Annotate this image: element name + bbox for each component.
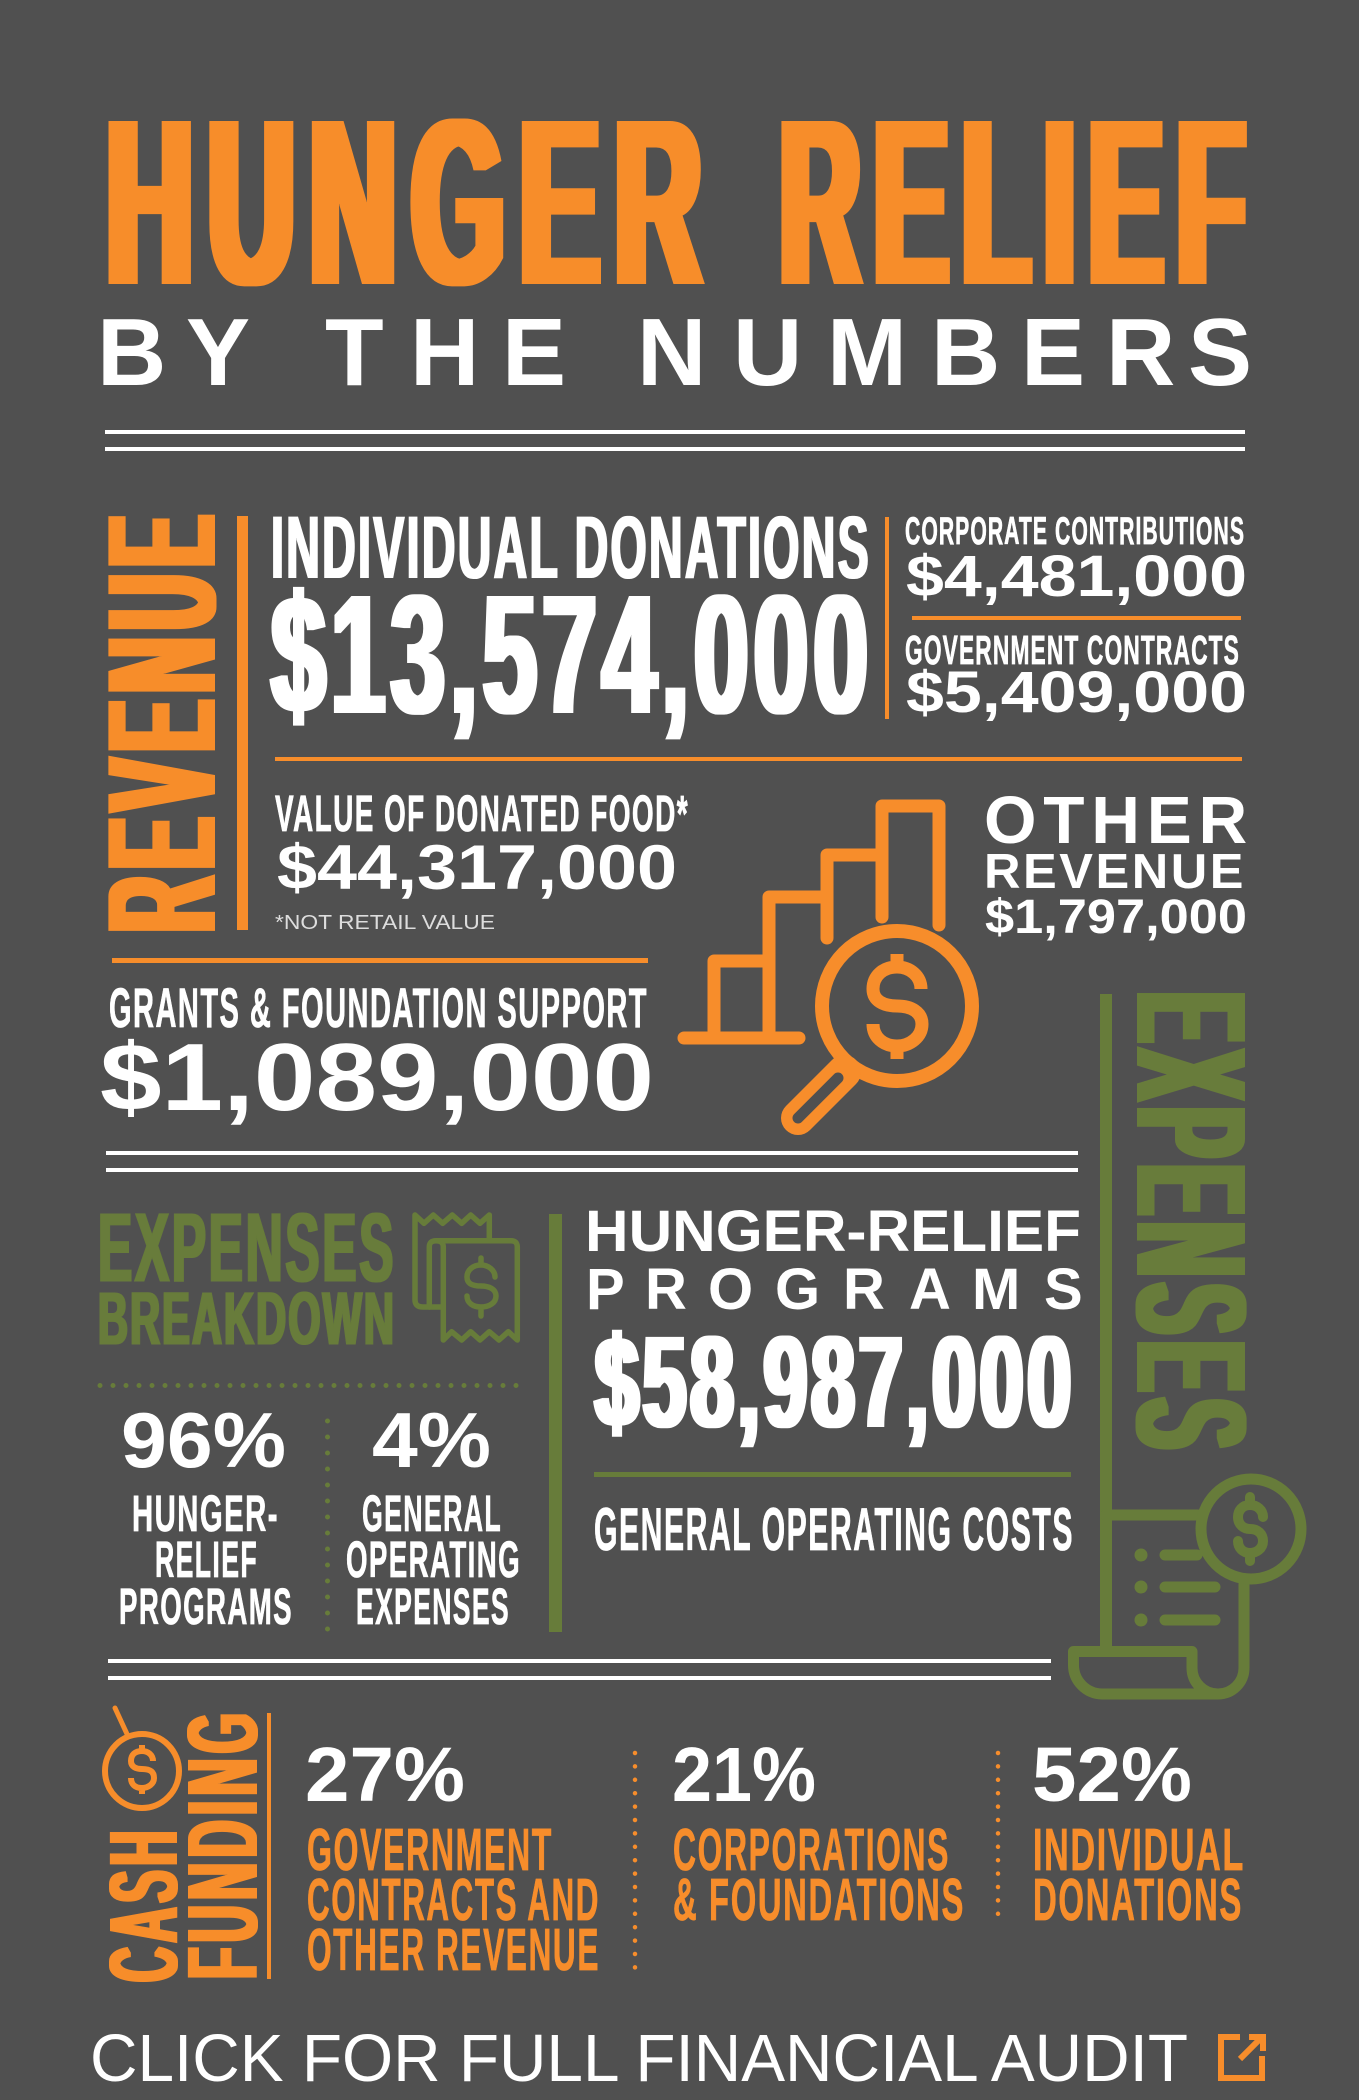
hunger relief programs: HUNGER-RELIEF — [585, 1199, 1081, 1264]
stat: 21 percent: 21% — [672, 1732, 816, 1818]
hunger relief programs: PROGRAMS — [586, 1257, 1083, 1322]
stat: 27 percent: CONTRACTS AND — [307, 1867, 600, 1933]
value of donated food — [275, 785, 689, 934]
icon: coin on stem — [105, 1708, 179, 1808]
grants and foundation support: $1,089,000 — [100, 1024, 654, 1131]
divider — [885, 517, 889, 719]
stat: 96 percent — [119, 1396, 293, 1635]
grants and foundation support — [100, 976, 654, 1131]
icon: chart with magnifier — [684, 806, 972, 1118]
call to action: CLICK FOR FULL FINANCIAL AUDIT — [90, 2021, 1188, 2096]
value of donated food: *NOT RETAIL VALUE — [275, 912, 495, 934]
stat: 27 percent: 27% — [305, 1732, 465, 1818]
grants and foundation support: GRANTS & FOUNDATION SUPPORT — [109, 976, 648, 1039]
stat: 27 percent: GOVERNMENT — [307, 1817, 553, 1883]
stat: 96 percent: RELIEF — [155, 1531, 258, 1588]
breakdown heading — [98, 1193, 396, 1360]
hunger relief programs — [585, 1199, 1083, 1455]
stat: 52 percent: 52% — [1032, 1732, 1192, 1818]
individual donations — [271, 497, 873, 750]
stat: 96 percent: PROGRAMS — [119, 1578, 293, 1635]
cash funding heading: FUNDING — [167, 1708, 279, 1979]
rule above expenses — [106, 1151, 1078, 1172]
value of donated food: $44,317,000 — [277, 833, 677, 903]
title: HUNGER — [106, 70, 716, 335]
other revenue: OTHER — [984, 783, 1254, 858]
stat: 27 percent: OTHER REVENUE — [307, 1917, 600, 1983]
value of donated food: VALUE OF DONATED FOOD* — [275, 785, 689, 842]
panel: revenue: REVENUE — [75, 508, 248, 932]
government contracts — [905, 627, 1247, 725]
rule above cash funding — [108, 1659, 1051, 1680]
stat: 4 percent — [346, 1396, 521, 1635]
panel: expenses breakdown — [98, 1193, 1083, 1635]
breakdown heading: EXPENSES — [98, 1193, 396, 1302]
stat: 27 percent — [305, 1732, 600, 1983]
panel: revenue — [75, 497, 1254, 1131]
stat: 96 percent: 96% — [121, 1396, 286, 1484]
other revenue: REVENUE — [984, 845, 1246, 899]
cash funding heading — [89, 1708, 279, 1982]
icon: receipts — [415, 1215, 517, 1340]
icon: scroll with coin — [1074, 994, 1301, 1694]
cash funding heading: CASH — [89, 1826, 198, 1982]
top double rule — [105, 430, 1245, 451]
stat: 21 percent — [672, 1732, 965, 1933]
other revenue — [984, 783, 1254, 944]
breakdown heading: BREAKDOWN — [98, 1277, 396, 1360]
panel: expenses heading and scroll: EXPENSES — [1103, 992, 1278, 1456]
stat: 21 percent: & FOUNDATIONS — [673, 1867, 965, 1933]
revenue bar — [237, 516, 248, 930]
stat: 96 percent: HUNGER- — [132, 1485, 279, 1542]
panel: cash funding — [89, 1708, 1245, 1983]
stat: 4 percent: OPERATING — [346, 1531, 521, 1588]
individual donations: $13,574,000 — [271, 560, 873, 750]
panel: expenses heading and scroll — [1074, 992, 1301, 1694]
stat: 52 percent — [1032, 1732, 1245, 1933]
corporate contributions — [905, 510, 1247, 609]
government contracts: $5,409,000 — [906, 660, 1247, 725]
stat: 4 percent: 4% — [372, 1396, 491, 1484]
other revenue: $1,797,000 — [985, 891, 1247, 944]
stat: 4 percent: EXPENSES — [356, 1578, 510, 1635]
stat: 21 percent: CORPORATIONS — [673, 1817, 950, 1883]
subtitle: BY THE NUMBERS — [97, 299, 1252, 406]
stat: 4 percent: GENERAL — [362, 1485, 502, 1542]
corporate contributions: $4,481,000 — [906, 544, 1247, 609]
icon: external link — [1221, 2037, 1263, 2078]
